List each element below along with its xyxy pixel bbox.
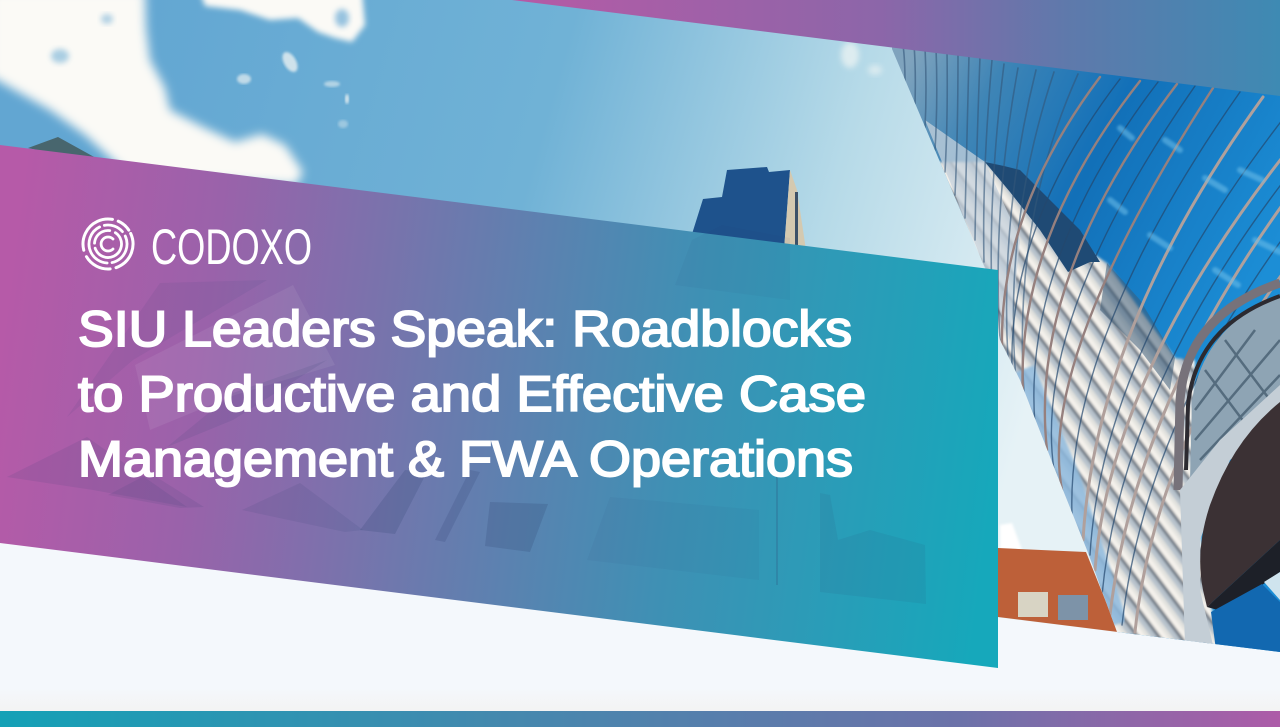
logo wordmark: CODOXO: [151, 219, 312, 275]
top gradient band: [512, 0, 1280, 96]
pale blue sky reflection: [1022, 370, 1115, 625]
title: SIU Leaders Speak: Roadblocks: [78, 301, 852, 357]
logo: CODOXO: [75, 211, 312, 277]
atrium frame: [1178, 283, 1280, 490]
ghosted building image in panel: [7, 225, 926, 604]
curved grey podium: [1180, 385, 1280, 645]
lower reflected skyline: [1100, 263, 1175, 390]
dark reflected skyline: [985, 162, 1100, 272]
atrium inner shadow: [1186, 296, 1280, 470]
main ribs: [1002, 77, 1213, 490]
bottom gradient bar: [0, 711, 1280, 727]
glass curtain wall: [880, 30, 1280, 660]
title: to Productive and Effective Case: [78, 366, 866, 422]
central dark tower: [692, 167, 790, 250]
blue lower glass: [1211, 584, 1280, 652]
footer fade strip: [0, 688, 1280, 711]
title: Management & FWA Operations: [78, 431, 853, 487]
logo icon: concentric broken rings: [75, 211, 141, 277]
clouds: [0, 0, 1022, 550]
curved ribs: [903, 45, 1280, 632]
tower mast: [795, 192, 798, 252]
window highlights: [1110, 128, 1280, 285]
arched atrium window: [1190, 295, 1280, 480]
glass skyscraper: [880, 30, 1280, 660]
red brick building: [998, 548, 1118, 632]
fine ribs at far edge: [903, 45, 1078, 405]
pale reflective lower facade: [930, 162, 1220, 660]
distant building, left: [28, 137, 96, 158]
dark lower beam: [1207, 540, 1280, 612]
dark secondary ribs: [1012, 79, 1280, 625]
central tower side: [784, 170, 806, 250]
sky gap under podium: [1264, 572, 1280, 600]
main gradient panel: [0, 145, 998, 668]
dark soffit: [1200, 402, 1280, 607]
left grid haze: [925, 120, 1020, 340]
title: [78, 301, 866, 487]
atrium window mullions: [1195, 330, 1280, 460]
